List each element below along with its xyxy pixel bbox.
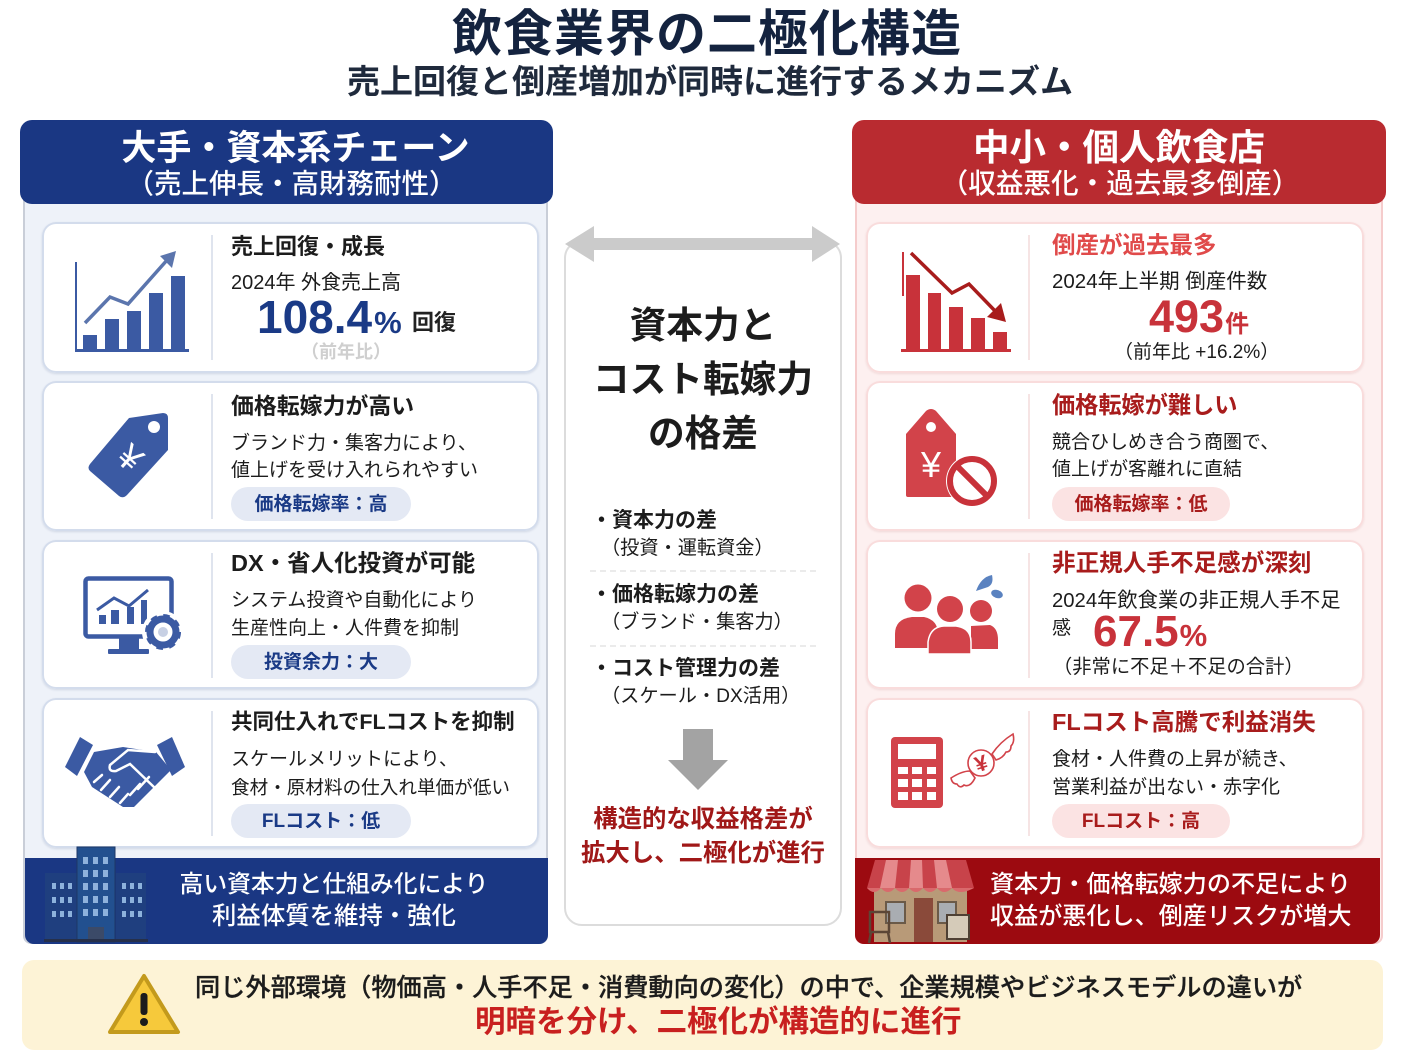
body text: ブランド力・集客力により、 (231, 433, 477, 454)
card: joint purchasing (42, 698, 539, 848)
card: labor shortage (866, 540, 1364, 689)
banner text: 利益体質を維持・強化 (212, 903, 456, 930)
list item: pricing: ・価格転嫁力の差 (591, 583, 759, 606)
pill: 投資余力：大 (264, 652, 378, 673)
heading: 売上回復・成長 (231, 234, 385, 259)
icon: yen price tag: ¥ (108, 435, 152, 480)
pill (1052, 487, 1230, 521)
big number: 108.4%: 108.4% (257, 291, 402, 343)
heading: 倒産が過去最多 (1052, 232, 1216, 258)
header: large chains (20, 120, 553, 204)
banner text: 収益が悪化し、倒産リスクが増大 (990, 903, 1351, 930)
heading: 非正規人手不足感が深刻 (1052, 551, 1312, 577)
icon: handshake (65, 737, 185, 807)
icon: office buildings (44, 846, 148, 942)
pill: FLコスト：低 (262, 811, 380, 832)
icon: rising bar chart (75, 251, 189, 352)
icon: monitor and gear (83, 576, 181, 654)
body text: 2024年 外食売上高 (231, 272, 401, 294)
center conclusion (581, 806, 825, 867)
header title: 中小・個人飲食店 (973, 127, 1265, 168)
body text: 感 (1052, 618, 1071, 639)
icon: calculator and flying yen (891, 732, 1014, 808)
banner text: 資本力・価格転嫁力の不足により (990, 871, 1351, 898)
icon: storefront (867, 860, 974, 944)
list item: cost control (591, 656, 800, 707)
body text: 競合ひしめき合う商圏で、 (1052, 432, 1279, 453)
body text: 値上げが客離れに直結 (1052, 459, 1242, 480)
center heading: 資本力と (630, 305, 776, 346)
list item: capital: （投資・運転資金） (601, 538, 774, 559)
list item: capital (591, 508, 774, 559)
list item: pricing: （ブランド・集客力） (601, 612, 793, 633)
title: 飲食業界の二極化構造 (452, 6, 962, 62)
icon: people with sweat drops (895, 575, 1003, 654)
body text (1052, 432, 1279, 480)
banner: large chains conclusion (25, 858, 548, 944)
icon: warning triangle (108, 974, 180, 1034)
list item: cost control: （スケール・DX活用） (601, 686, 800, 707)
banner: small restaurants conclusion (855, 858, 1380, 944)
year-on-year note: （前年比 +16.2%） (1114, 342, 1279, 363)
icon: falling bar chart (901, 252, 1011, 352)
icon: calculator and flying yen: ¥ (971, 749, 992, 777)
faded note: （前年比） (301, 342, 391, 362)
heading: 共同仕入れでFLコストを抑制 (231, 710, 515, 734)
body text: システム投資や自動化により (231, 590, 477, 611)
body text (231, 432, 478, 481)
body text (231, 749, 510, 798)
pill (231, 487, 411, 521)
body text: 営業利益が出ない・赤字化 (1052, 777, 1280, 798)
center heading (593, 305, 813, 454)
heading: FLコスト高騰で利益消失 (1052, 709, 1316, 735)
banner text: 高い資本力と仕組み化により (180, 871, 488, 898)
panel: large chains (23, 190, 548, 944)
banner text (180, 871, 488, 930)
center conclusion: 拡大し、二極化が進行 (581, 840, 825, 867)
callout: bottom message (22, 960, 1383, 1050)
big number: 493: 493件 (1149, 291, 1249, 342)
panel: center gap (564, 240, 842, 926)
body text (1052, 748, 1298, 798)
center conclusion: 構造的な収益格差が (593, 806, 813, 833)
pill (231, 645, 411, 679)
card: record bankruptcies (866, 222, 1364, 373)
body text: 生産性向上・人件費を抑制 (231, 618, 459, 639)
callout line 1: 同じ外部環境（物価高・人手不足・消費動向の変化）の中で、企業規模やビジネスモデルの違いが (195, 974, 1302, 1002)
header subtitle: （売上伸長・高財務耐性） (126, 168, 456, 199)
header title: 大手・資本系チェーン (121, 129, 470, 168)
center heading: コスト転嫁力 (593, 359, 813, 400)
body text (1052, 590, 1340, 639)
card: DX investment (42, 540, 539, 689)
arrow: double-headed (565, 226, 840, 262)
list item: pricing (591, 582, 793, 633)
card: pricing power high (42, 381, 539, 531)
card: FL cost surge (866, 698, 1364, 848)
pill: FLコスト：高 (1082, 811, 1200, 832)
pill (1052, 804, 1230, 838)
heading: DX・省人化投資が可能 (231, 550, 475, 576)
arrow: down (668, 729, 728, 790)
body text: 食材・原材料の仕入れ単価が低い (231, 777, 510, 798)
body text: 値上げを受け入れられやすい (231, 460, 478, 481)
header: small restaurants (852, 120, 1386, 204)
header subtitle: （収益悪化・過去最多倒産） (941, 168, 1299, 199)
icon: price tag with prohibition: ¥ (920, 444, 942, 485)
callout line 2: 明暗を分け、二極化が構造的に進行 (475, 1005, 961, 1039)
banner text (990, 871, 1351, 930)
icon: price tag with prohibition (906, 409, 997, 506)
list item: capital: ・資本力の差 (591, 509, 717, 532)
heading: 価格転嫁力が高い (231, 393, 414, 419)
icon: yen price tag (88, 413, 168, 498)
card: pricing difficult (866, 381, 1364, 531)
pill (231, 804, 411, 838)
pill: 価格転嫁率：低 (1074, 494, 1208, 515)
body text: 食材・人件費の上昇が続き、 (1052, 749, 1298, 770)
body text: 2024年飲食業の非正規人手不足 (1052, 590, 1340, 612)
panel: small restaurants (855, 190, 1383, 944)
big number: 67.5%: 67.5% (1093, 607, 1207, 656)
body text (231, 590, 477, 639)
body text: スケールメリットにより、 (231, 749, 458, 770)
card: sales recovery (42, 222, 539, 373)
recovery label: 回復 (412, 310, 456, 335)
pill: 価格転嫁率：高 (254, 494, 388, 515)
heading: 価格転嫁が難しい (1052, 392, 1238, 418)
subtitle: 売上回復と倒産増加が同時に進行するメカニズム (347, 63, 1073, 100)
body text: 2024年上半期 倒産件数 (1052, 270, 1267, 293)
definition note: （非常に不足＋不足の合計） (1053, 657, 1304, 678)
center heading: の格差 (648, 413, 758, 454)
list item: cost control: ・コスト管理力の差 (591, 657, 780, 680)
